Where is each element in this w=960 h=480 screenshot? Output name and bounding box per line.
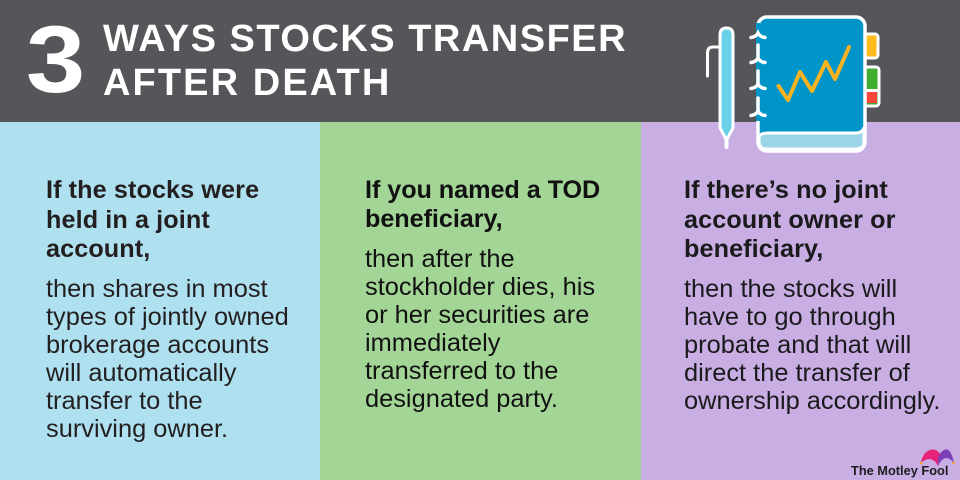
text: no beneficiary: have to go through	[684, 303, 896, 331]
heading: joint account: held in a joint	[46, 206, 210, 234]
text: no beneficiary: direct the transfer of	[684, 359, 910, 387]
logo: The Motley Fool	[851, 449, 955, 478]
text: no beneficiary: probate and that will	[684, 331, 911, 359]
heading: joint account: account,	[46, 235, 150, 263]
icon: rings	[751, 23, 765, 121]
text: joint account: brokerage accounts	[46, 331, 269, 359]
logo wordmark: The Motley Fool	[851, 463, 948, 478]
text: TOD beneficiary: then after the	[365, 245, 515, 273]
text: no beneficiary	[684, 275, 940, 415]
text: joint account	[46, 275, 289, 443]
heading: joint account: If the stocks were	[46, 176, 259, 204]
panel: TOD beneficiary	[320, 122, 641, 480]
icon: chart line	[778, 47, 849, 100]
panel: no beneficiary	[641, 122, 960, 480]
heading: no beneficiary: beneficiary,	[684, 235, 823, 263]
heading: no beneficiary: account owner or	[684, 206, 896, 234]
icon: pen and notebook	[706, 15, 880, 153]
icon: tabs	[860, 34, 879, 106]
text: joint account: surviving owner.	[46, 415, 228, 443]
text: TOD beneficiary: transferred to the	[365, 357, 558, 385]
icon: jester hat	[920, 449, 955, 466]
text: no beneficiary: then the stocks will	[684, 275, 897, 303]
title	[103, 18, 627, 104]
text: joint account: then shares in most	[46, 275, 268, 303]
text: TOD beneficiary: immediately	[365, 329, 500, 357]
title: AFTER DEATH	[103, 62, 391, 104]
heading: TOD beneficiary: beneficiary,	[365, 205, 503, 233]
heading: joint account	[46, 176, 259, 263]
text: TOD beneficiary: stockholder dies, his	[365, 273, 595, 301]
heading: TOD beneficiary: If you named a TOD	[365, 176, 600, 204]
text: joint account: will automatically	[46, 359, 236, 387]
heading: no beneficiary	[684, 176, 896, 263]
heading: no beneficiary: If there’s no joint	[684, 176, 888, 204]
heading: TOD beneficiary	[365, 176, 600, 233]
text: joint account: types of jointly owned	[46, 303, 289, 331]
text: TOD beneficiary: designated party.	[365, 385, 558, 413]
text: TOD beneficiary	[365, 245, 595, 413]
icon: notebook	[758, 17, 865, 151]
text: joint account: transfer to the	[46, 387, 203, 415]
panel: joint account	[0, 122, 320, 480]
text: no beneficiary: ownership accordingly.	[684, 387, 940, 415]
icon: pen	[708, 28, 733, 147]
header band	[0, 0, 960, 122]
text: TOD beneficiary: or her securities are	[365, 301, 589, 329]
title: WAYS STOCKS TRANSFER	[103, 18, 627, 60]
big number 3: 3	[26, 7, 85, 113]
